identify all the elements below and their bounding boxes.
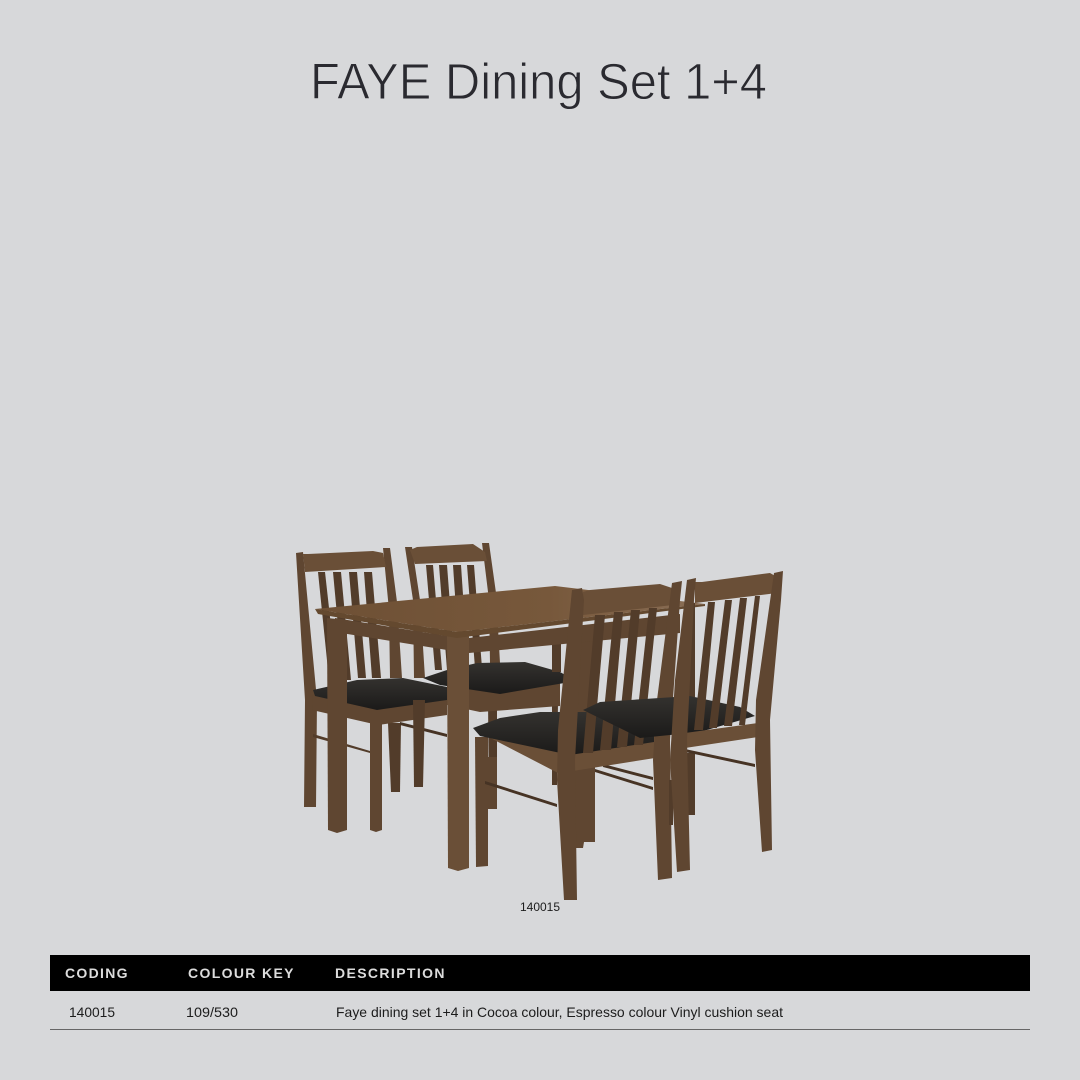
product illustration: dining set [296, 543, 783, 900]
table row: 140015 [69, 1004, 115, 1020]
front left chair [473, 581, 682, 900]
back left chair [296, 548, 447, 832]
table header bar [50, 955, 1030, 991]
specification table [50, 955, 1030, 1030]
table header bar: CODING [65, 965, 128, 981]
table [315, 586, 705, 871]
back right chair [405, 543, 576, 808]
table row: 109/530 [186, 1004, 238, 1020]
table header bar: COLOUR KEY [188, 965, 294, 981]
product code caption: 140015 [520, 900, 560, 914]
front right chair [583, 571, 783, 872]
table row [50, 1004, 1030, 1030]
table row: Faye dining set 1+4 in Cocoa colour, Espresso colour Vinyl cushion seat [336, 1004, 783, 1020]
title: FAYE Dining Set 1+4 [310, 53, 767, 110]
table header bar: DESCRIPTION [335, 965, 444, 981]
